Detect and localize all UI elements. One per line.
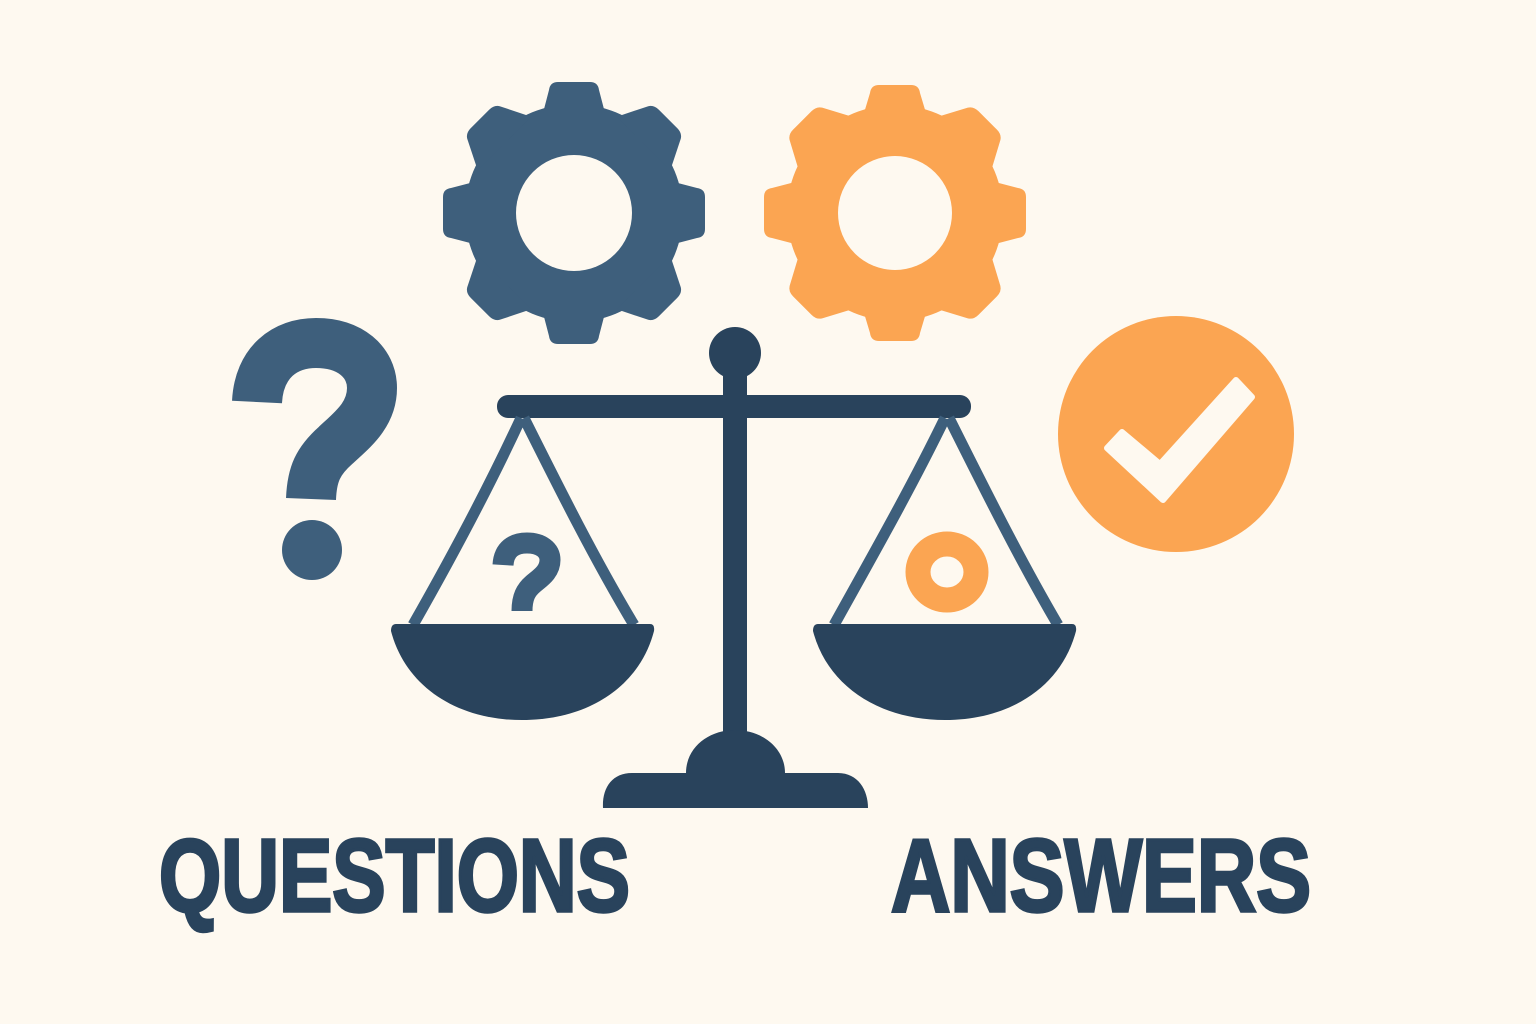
left pan strings xyxy=(413,418,634,625)
icon: blue gear xyxy=(443,82,705,344)
balance scale xyxy=(391,327,1076,808)
icon: orange gear xyxy=(764,85,1026,341)
label: answers: ANSWERS xyxy=(891,818,1311,933)
right pan xyxy=(813,624,1076,720)
scale post and finial xyxy=(709,327,761,740)
scale base xyxy=(603,730,868,808)
right pan strings xyxy=(834,418,1058,625)
left pan xyxy=(391,624,654,720)
icon: small question mark on left pan xyxy=(503,543,550,611)
icon: check mark badge xyxy=(1058,316,1294,552)
scale beam xyxy=(497,395,971,418)
label: questions: QUESTIONS xyxy=(159,818,630,933)
icon: large question mark xyxy=(257,343,372,580)
icon: orange ring on right pan xyxy=(918,544,976,600)
